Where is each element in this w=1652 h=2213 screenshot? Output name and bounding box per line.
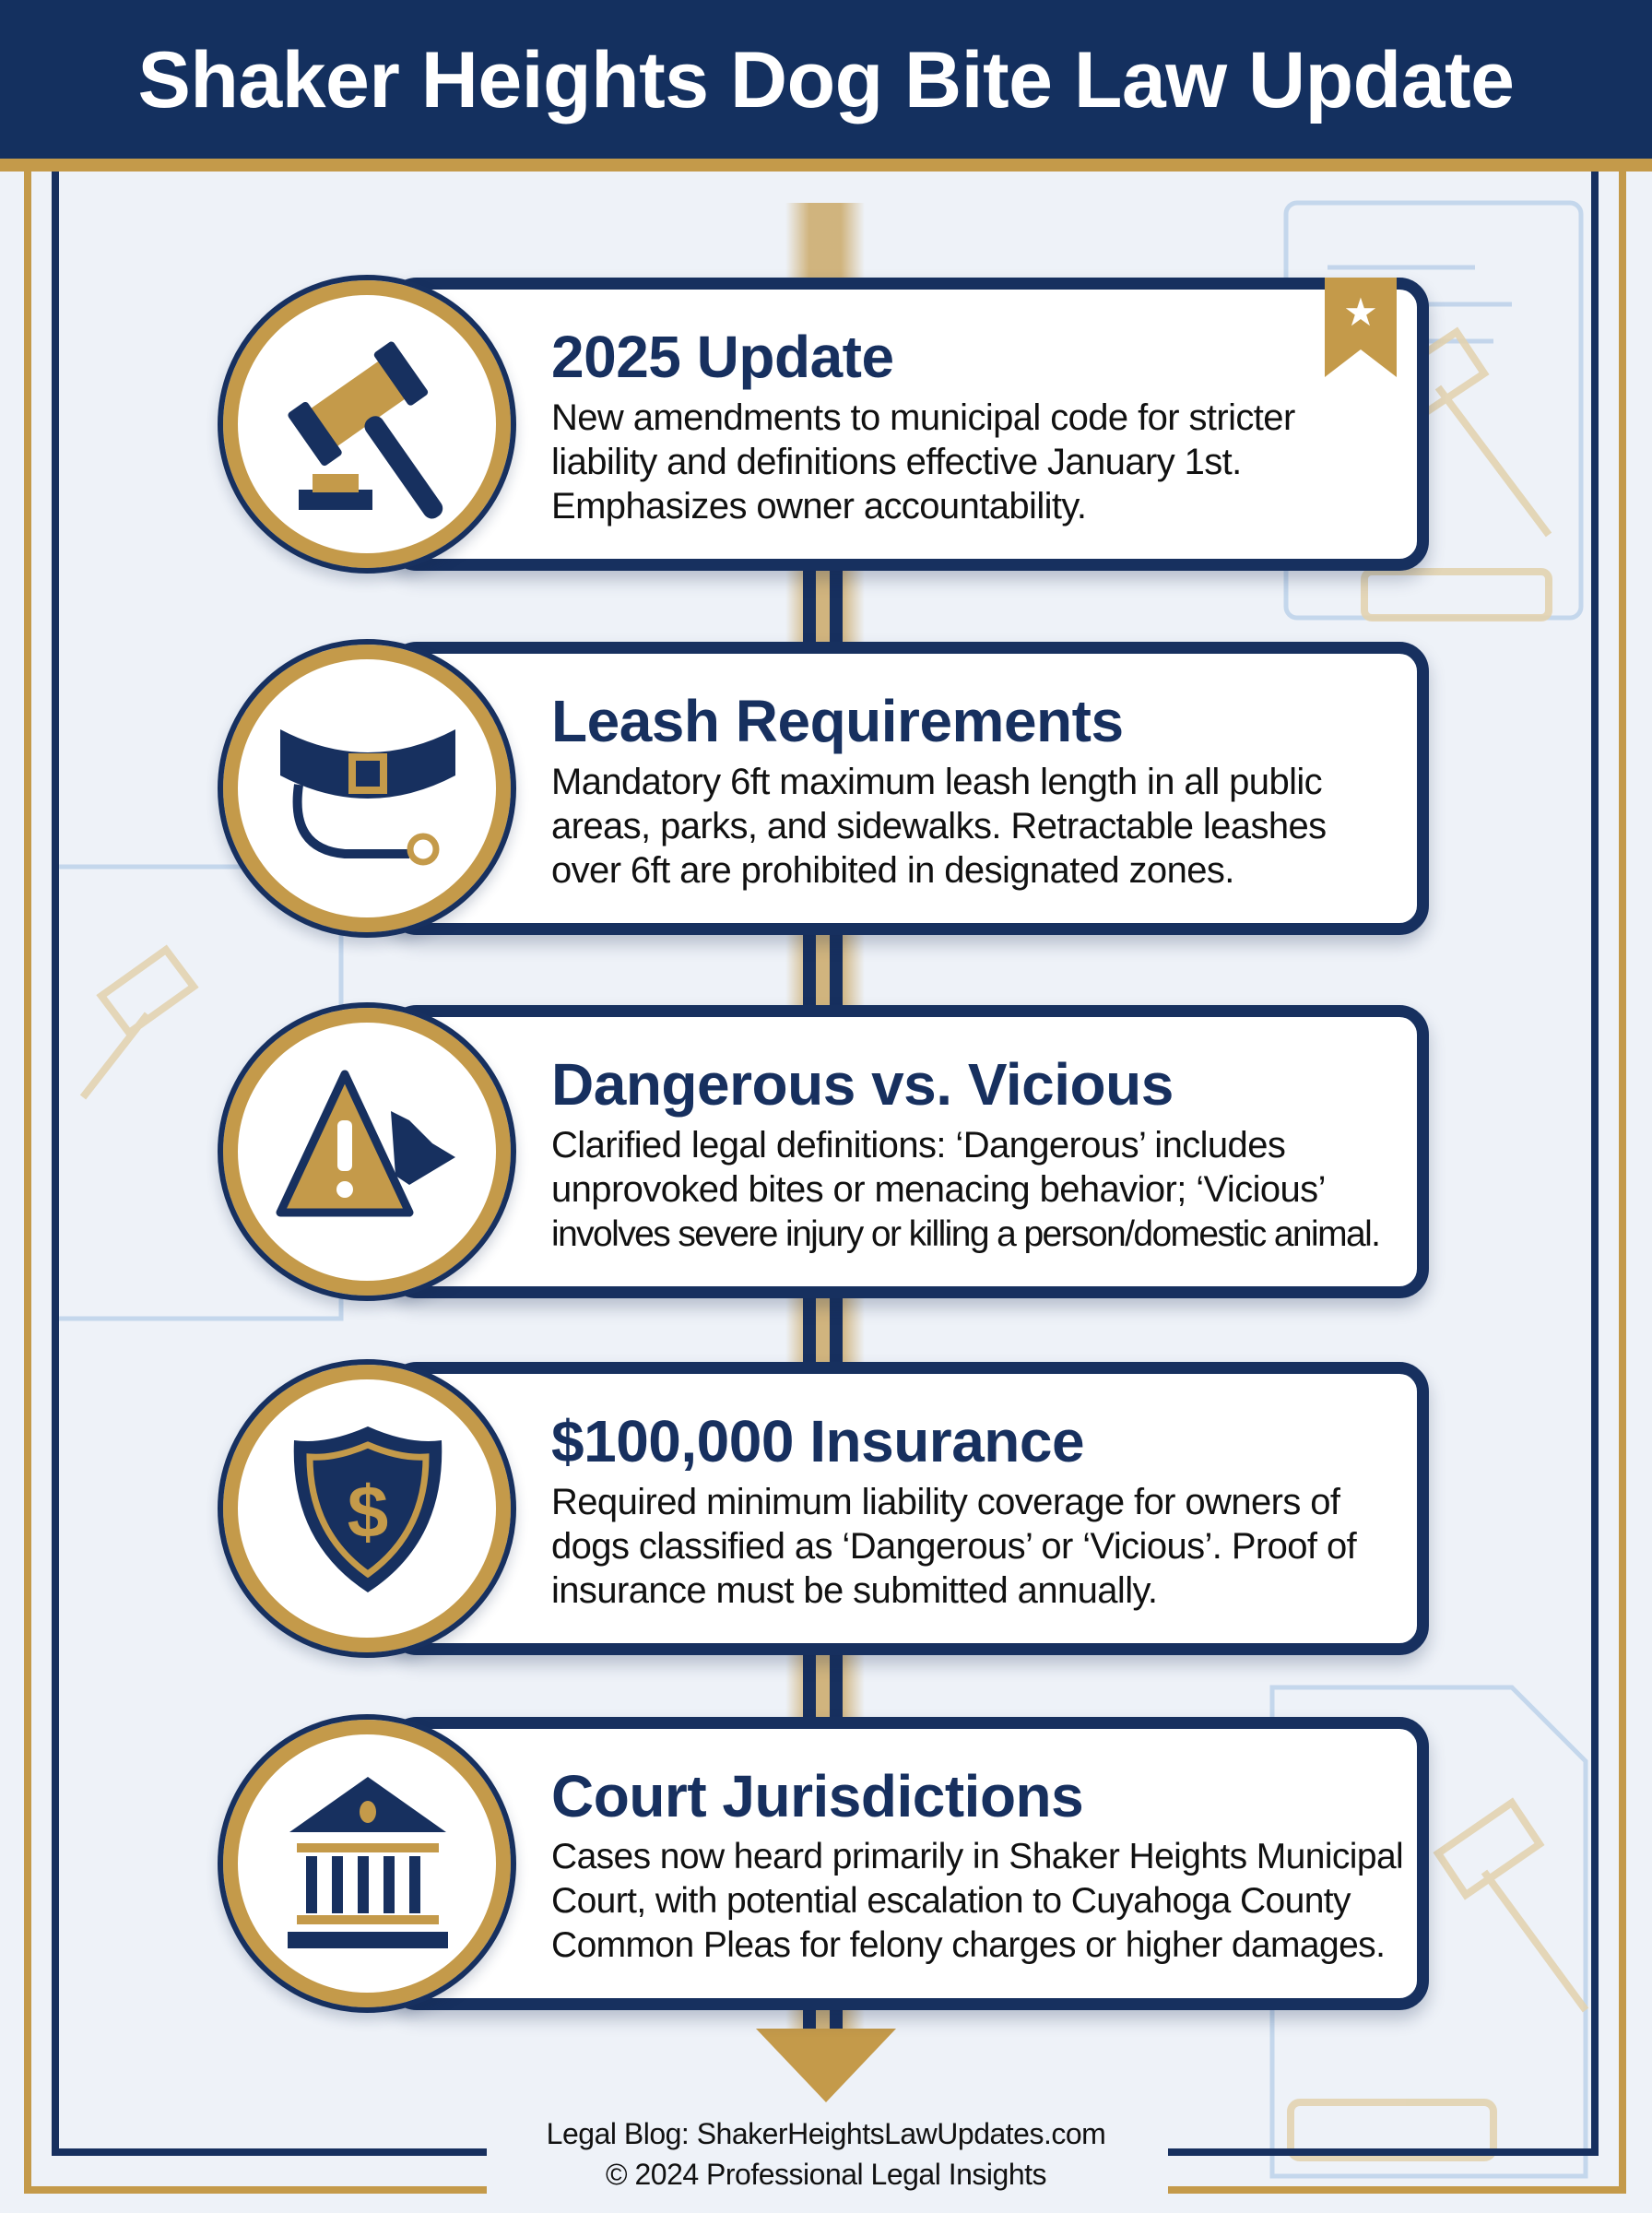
card 3: Dangerous vs. Vicious: Clarified legal definitions: ‘Dangerous’ includes: [551, 1125, 1285, 1166]
card 1: 2025 Update: Emphasizes owner accountability.: [551, 486, 1086, 527]
card 4: $100,000 Insurance: Required minimum liability coverage for owners of: [551, 1482, 1339, 1522]
icon: courthouse: [218, 1714, 516, 2013]
icon: collar and leash: [218, 639, 516, 938]
icon: shield dollar: [218, 1359, 516, 1658]
card 1: 2025 Update: New amendments to municipal code for stricter: [551, 397, 1295, 438]
card 3: Dangerous vs. Vicious: involves severe injury or killing a person/domestic animal.: [551, 1214, 1379, 1254]
card 2: Leash Requirements: areas, parks, and sidewalks. Retractable leashes: [551, 806, 1327, 846]
card 3: Dangerous vs. Vicious: Dangerous vs. Vicious: [551, 1051, 1174, 1118]
card 4: $100,000 Insurance: $100,000 Insurance: [551, 1408, 1084, 1474]
card 5: Court Jurisdictions: Common Pleas for felony charges or higher damages.: [551, 1925, 1385, 1965]
icon: ribbon star: ★: [1343, 290, 1378, 334]
card 5: Court Jurisdictions: Court Jurisdictions: [551, 1763, 1083, 1829]
icon: warning with dog: [218, 1002, 516, 1301]
icon: ribbon star: [1325, 278, 1397, 377]
header bar: [0, 0, 1652, 159]
card 4: $100,000 Insurance: [212, 1359, 1438, 1673]
title: Shaker Heights Dog Bite Law Update: [137, 36, 1515, 124]
footer text: Legal Blog: ShakerHeightsLawUpdates.com: [547, 2117, 1105, 2150]
card 1: 2025 Update: liability and definitions effective January 1st.: [551, 442, 1242, 482]
card 2: Leash Requirements: Mandatory 6ft maximum leash length in all public: [551, 762, 1322, 802]
card 5: Court Jurisdictions: [212, 1714, 1438, 2029]
card 2: Leash Requirements: over 6ft are prohibited in designated zones.: [551, 850, 1234, 891]
card 5: Court Jurisdictions: Court, with potential escalation to Cuyahoga County: [551, 1881, 1351, 1921]
footer text: © 2024 Professional Legal Insights: [606, 2158, 1046, 2191]
card 2: Leash Requirements: Leash Requirements: [551, 688, 1124, 754]
header gold stripe: [0, 159, 1652, 172]
icon: shield dollar: $: [348, 1471, 388, 1553]
card 4: $100,000 Insurance: insurance must be submitted annually.: [551, 1570, 1157, 1611]
card 1: 2025 Update: [212, 275, 1438, 588]
arrow down: [756, 2029, 896, 2102]
card 5: Court Jurisdictions: Cases now heard primarily in Shaker Heights Municipal: [551, 1837, 1403, 1876]
footer text: [547, 2117, 1105, 2191]
card 4: $100,000 Insurance: dogs classified as ‘Dangerous’ or ‘Vicious’. Proof of: [551, 1526, 1356, 1567]
card 3: Dangerous vs. Vicious: [212, 1002, 1438, 1317]
card 3: Dangerous vs. Vicious: unprovoked bites or menacing behavior; ‘Vicious’: [551, 1169, 1326, 1210]
icon: gavel: [218, 275, 516, 574]
heading: 2025 Update: [551, 324, 894, 390]
card 2: Leash Requirements: [212, 639, 1438, 953]
